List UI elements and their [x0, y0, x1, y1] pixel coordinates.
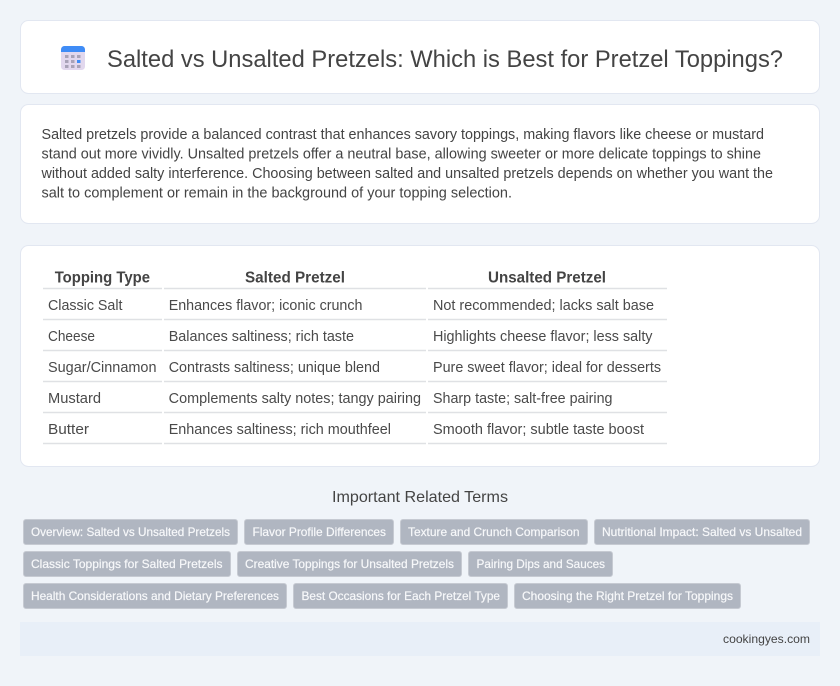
tag	[24, 520, 238, 544]
table header row: Salted Pretzel	[245, 270, 345, 286]
table row: butter	[48, 422, 644, 438]
text block: summary	[41, 127, 773, 202]
tag	[468, 552, 612, 576]
text block: summary: stand out more vividly. Unsalted pretzels offer a neutral base, allowing sweeter or more delicate toppings to shine	[42, 146, 761, 162]
table row: mustard	[48, 391, 612, 407]
panel: header	[20, 20, 820, 94]
table row: classic salt: Classic Salt	[48, 298, 123, 314]
table header row: Unsalted Pretzel	[488, 270, 606, 286]
title: Salted vs Unsalted Pretzels: Which is Best for Pretzel Toppings?	[107, 46, 783, 73]
tag: Flavor Profile Differences	[252, 525, 386, 539]
table row: classic salt: Not recommended; lacks salt base	[433, 298, 654, 314]
footer credit: cookingyes.com	[723, 632, 810, 646]
tag: Texture and Crunch Comparison	[408, 525, 580, 539]
table row: sugar/cinnamon: Pure sweet flavor; ideal for desserts	[433, 360, 661, 376]
text block: summary: Salted pretzels provide a balanced contrast that enhances savory toppings, making flavors like cheese or mustard	[42, 127, 764, 143]
table row: cheese: Cheese	[48, 329, 95, 345]
icon: calendar	[61, 46, 85, 70]
table row: butter: Enhances saltiness; rich mouthfeel	[169, 422, 391, 438]
heading: related terms: Important Related Terms	[332, 489, 508, 506]
tag	[244, 520, 394, 544]
tag: Classic Toppings for Salted Pretzels	[31, 557, 222, 571]
table row: mustard: Mustard	[48, 391, 101, 407]
text block: summary: without added salty interference. Choosing between salted and unsalted pretzels depends on whether you want the	[41, 166, 773, 182]
tag	[400, 520, 588, 544]
tag	[294, 584, 508, 608]
tag	[514, 584, 740, 608]
table row: classic salt: Enhances flavor; iconic crunch	[169, 298, 362, 314]
tag: Pairing Dips and Sauces	[476, 557, 605, 571]
table row: sugar/cinnamon: Sugar/Cinnamon	[48, 360, 156, 376]
table row: sugar/cinnamon: Contrasts saltiness; unique blend	[169, 360, 380, 376]
table row: classic salt	[48, 298, 654, 314]
table row: cheese: Balances saltiness; rich taste	[169, 329, 354, 345]
tag: Best Occasions for Each Pretzel Type	[302, 589, 500, 603]
tag: Overview: Salted vs Unsalted Pretzels	[31, 525, 230, 539]
table row: mustard: Complements salty notes; tangy pairing	[169, 391, 421, 407]
panel: summary paragraph	[20, 104, 820, 224]
table row: mustard: Sharp taste; salt-free pairing	[433, 391, 612, 407]
table header row	[55, 270, 606, 286]
text block: summary: salt to complement or remain in the background of your topping selection.	[42, 186, 512, 202]
tag: Creative Toppings for Unsalted Pretzels	[245, 557, 454, 571]
tag: Choosing the Right Pretzel for Toppings	[522, 589, 733, 603]
tag	[24, 584, 286, 608]
tag	[24, 552, 230, 576]
tag: Health Considerations and Dietary Preferences	[31, 589, 279, 603]
table row: sugar/cinnamon	[48, 360, 661, 376]
table row: butter: Butter	[48, 422, 89, 438]
panel: comparison table	[20, 246, 820, 466]
tag	[594, 520, 810, 544]
tags: related terms	[24, 520, 810, 608]
table header row: Topping Type	[55, 270, 150, 286]
tag: Nutritional Impact: Salted vs Unsalted	[602, 525, 802, 539]
tag	[238, 552, 462, 576]
table row: cheese	[48, 329, 653, 345]
table row: butter: Smooth flavor; subtle taste boost	[433, 422, 644, 438]
footer	[20, 622, 820, 656]
table row: cheese: Highlights cheese flavor; less salty	[433, 329, 653, 345]
